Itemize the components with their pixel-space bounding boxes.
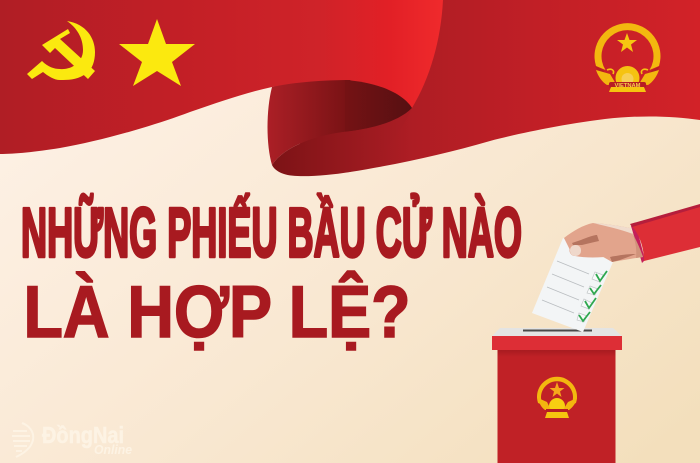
thumb xyxy=(570,245,612,258)
ballot box xyxy=(492,328,622,463)
wrist shadow xyxy=(632,232,643,258)
emblem label: VIETNAM xyxy=(614,83,640,89)
ribbon fold bottom xyxy=(272,108,412,176)
emblem gear xyxy=(616,66,640,90)
small emblem ring xyxy=(537,377,577,405)
small emblem base xyxy=(545,412,569,418)
thumbnail xyxy=(570,245,581,256)
ribbon fold inner dark xyxy=(345,80,412,132)
flag right section xyxy=(300,0,700,175)
emblem ring xyxy=(595,23,660,70)
box body xyxy=(498,350,616,463)
sleeve cuff xyxy=(631,225,645,263)
waving red flag xyxy=(0,0,700,176)
paper sheet xyxy=(532,238,613,332)
emblem laurel sides xyxy=(596,70,659,85)
flag left section xyxy=(0,0,443,154)
emblem gear core xyxy=(622,73,634,85)
emblem star xyxy=(617,33,637,52)
hand top highlight xyxy=(593,223,633,234)
icon: national emblem xyxy=(595,23,660,92)
checkmarks xyxy=(579,271,607,321)
palm shadow xyxy=(610,254,636,262)
emblem vines xyxy=(607,69,648,74)
small emblem band xyxy=(546,409,568,412)
box lid top xyxy=(492,328,622,336)
hand shadow xyxy=(572,235,599,247)
watermark logo xyxy=(12,422,132,457)
hand xyxy=(564,223,643,262)
emblem red band xyxy=(609,82,646,88)
ballot paper xyxy=(532,238,613,332)
box shadow xyxy=(498,350,616,357)
sleeve xyxy=(631,205,700,261)
emblem base ribbon xyxy=(609,87,646,92)
icon: hammer and sickle xyxy=(27,21,95,80)
small emblem laurel xyxy=(538,398,577,410)
title line 2: LÀ HỢP LỆ? xyxy=(24,272,410,353)
logo wordmark: ĐồngNai xyxy=(42,422,124,448)
hand and sleeve xyxy=(564,204,700,263)
small emblem star xyxy=(550,382,564,397)
small emblem gear xyxy=(549,398,565,414)
logo icon xyxy=(12,423,33,457)
icon: yellow star xyxy=(119,19,195,86)
sleeve top edge xyxy=(630,204,700,227)
paper lines xyxy=(542,261,589,313)
checkboxes xyxy=(577,272,603,322)
logo subtitle: Online xyxy=(94,442,132,457)
icon: small emblem on box xyxy=(537,377,577,418)
box lid front xyxy=(492,336,622,350)
emblem red ribbons xyxy=(595,66,660,82)
box slot xyxy=(523,330,592,332)
ribbon fold inner left xyxy=(268,80,352,165)
